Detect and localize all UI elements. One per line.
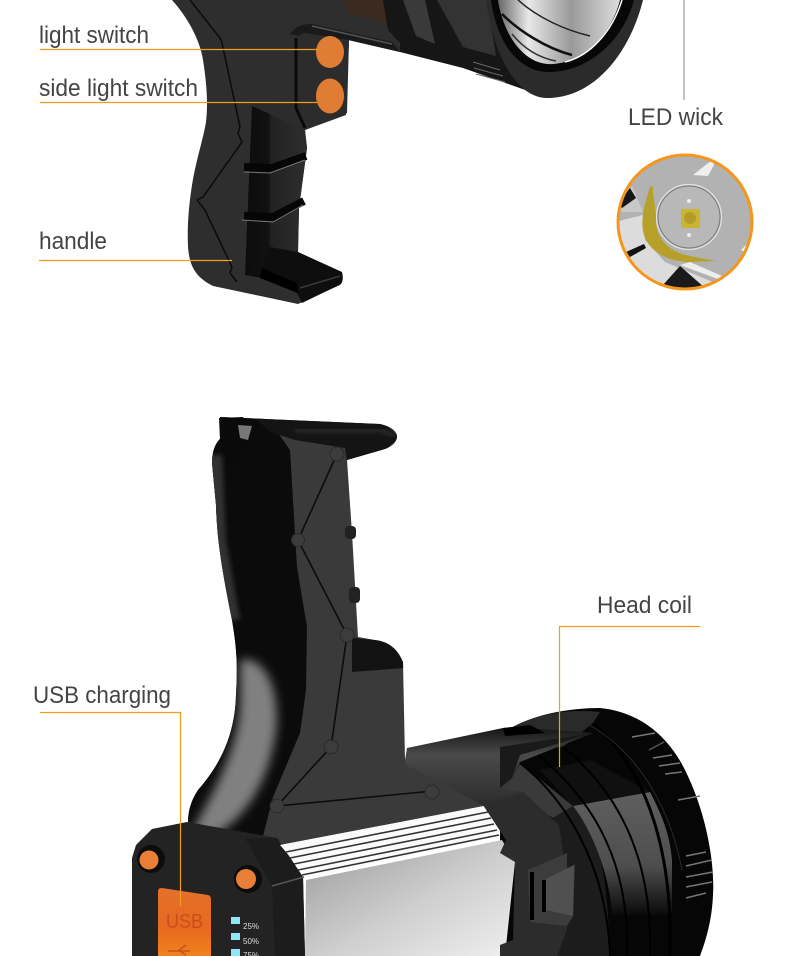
end cap button left xyxy=(137,845,165,873)
handle seam with studs xyxy=(270,447,439,813)
grip column xyxy=(245,106,307,275)
charging light indicators xyxy=(231,917,259,956)
callout: handle: handle xyxy=(39,228,107,255)
switch panel xyxy=(248,33,349,130)
top flashlight illustration xyxy=(172,0,643,304)
USB port cover: USB xyxy=(166,911,203,933)
LED ring xyxy=(658,186,720,248)
barrel neck xyxy=(343,0,390,24)
flashlight handle (top) xyxy=(172,0,400,304)
callout: LED wick: LED wick xyxy=(628,104,724,131)
handle seam line xyxy=(190,0,242,282)
handle pale highlight xyxy=(190,660,277,835)
side light switch button xyxy=(316,78,344,114)
silver ribbed body xyxy=(280,806,500,878)
neck strip xyxy=(290,24,400,52)
light switch button xyxy=(316,36,344,68)
chrome reflections xyxy=(620,215,712,286)
callout: side light switch: side light switch xyxy=(39,75,198,102)
seam lines xyxy=(520,723,670,956)
reflector xyxy=(498,0,620,64)
collar clip xyxy=(528,853,575,926)
handle base xyxy=(180,410,490,850)
LED chip xyxy=(681,209,700,228)
LED wick detail circle xyxy=(620,156,750,288)
charging light indicators: 25% xyxy=(243,922,259,931)
shoulder top xyxy=(352,638,404,672)
handle left dark zone xyxy=(180,410,307,840)
collar xyxy=(483,792,567,956)
foot xyxy=(245,247,343,303)
callout: USB charging xyxy=(33,682,180,906)
handle top edge xyxy=(255,418,400,462)
wide head xyxy=(495,700,720,956)
end cap xyxy=(132,822,305,956)
grip ridges xyxy=(242,156,306,222)
head base xyxy=(495,700,720,956)
silver panel xyxy=(305,840,515,956)
yellow crescent xyxy=(642,186,716,262)
neck xyxy=(405,727,593,806)
charging light indicators: 50% xyxy=(243,937,259,946)
bottom flashlight illustration xyxy=(132,410,720,956)
dark zone behind collar xyxy=(505,763,573,818)
wick circle border xyxy=(618,155,752,289)
handle outer sheen xyxy=(212,453,242,622)
head ring xyxy=(486,0,643,98)
end cap button right xyxy=(234,865,262,893)
callout: USB charging: USB charging xyxy=(33,682,171,709)
callout: Head coil xyxy=(560,592,700,767)
top clip notch xyxy=(219,417,252,467)
belt between arcs xyxy=(573,792,672,915)
callout: light switch: light switch xyxy=(39,22,149,49)
USB port cover xyxy=(158,888,211,956)
bezel knurling xyxy=(632,733,713,898)
wick background xyxy=(620,156,750,282)
handle (bottom) xyxy=(180,410,490,850)
callout: LED wick xyxy=(628,0,724,131)
barrel xyxy=(383,0,545,97)
callout: Head coil: Head coil xyxy=(597,592,692,619)
